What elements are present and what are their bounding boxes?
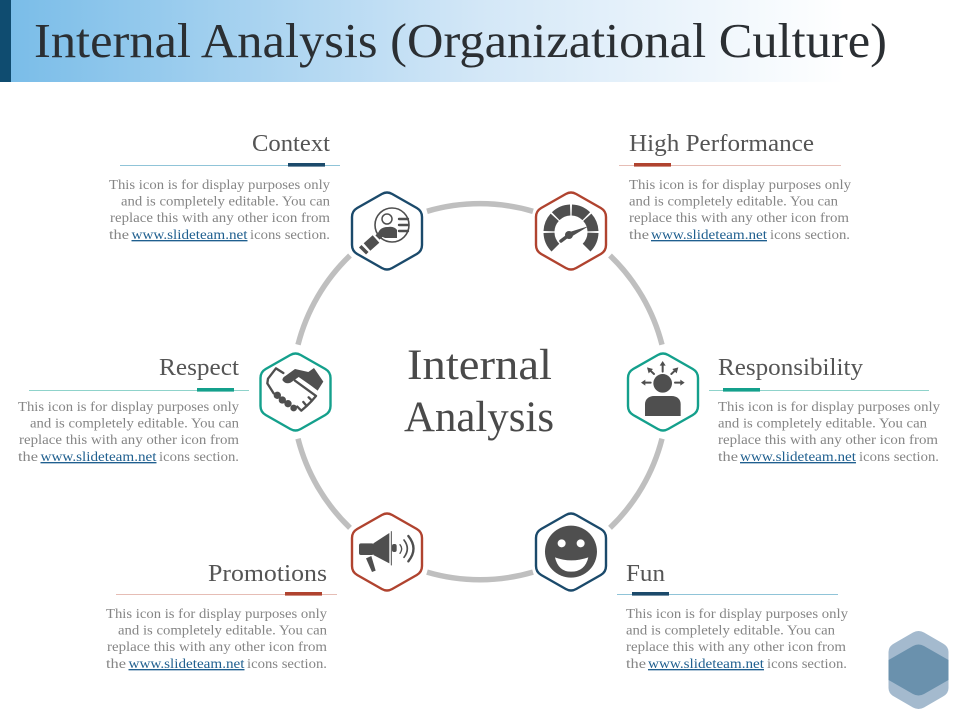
text: respect: replace this with any other icon from	[19, 432, 240, 447]
heading: high performance: High Performance	[629, 131, 814, 157]
text: context: the	[109, 227, 129, 242]
text: fun: www.slideteam.net	[648, 656, 764, 671]
centre label: Analysis	[404, 394, 554, 441]
text: promotions: the	[106, 656, 126, 671]
text: fun	[626, 606, 848, 671]
text: respect: This icon is for display purposes only	[18, 399, 239, 414]
text: context: www.slideteam.net	[132, 227, 248, 242]
text: high performance: icons section.	[770, 227, 850, 242]
text: promotions: This icon is for display purposes only	[106, 606, 327, 621]
heading: responsibility: Responsibility	[718, 355, 863, 381]
text: high performance	[629, 177, 851, 242]
text: fun: the	[626, 656, 646, 671]
text: respect: the	[18, 449, 38, 464]
icon: context magnifier	[352, 192, 422, 270]
text: responsibility: www.slideteam.net	[740, 449, 856, 464]
text: respect: icons section.	[159, 449, 239, 464]
rule: respect	[29, 388, 249, 392]
rule: responsibility	[709, 388, 929, 392]
icon: responsibility person with arrows	[628, 354, 698, 430]
text: promotions: icons section.	[247, 656, 327, 671]
text: fun: icons section.	[767, 656, 847, 671]
text: promotions	[106, 606, 328, 671]
rule: high performance	[619, 163, 841, 167]
icon: fun smiley	[536, 514, 606, 590]
text: responsibility: the	[718, 449, 738, 464]
centre label	[404, 342, 554, 441]
panel: context	[109, 131, 340, 242]
text: fun: This icon is for display purposes only	[626, 606, 848, 621]
text: high performance: This icon is for display purposes only	[629, 177, 851, 192]
text: respect	[18, 399, 240, 464]
panel: respect	[18, 355, 249, 464]
icon: respect handshake	[260, 354, 330, 430]
text: respect: www.slideteam.net	[40, 449, 157, 464]
text: responsibility	[718, 399, 940, 464]
text: high performance: www.slideteam.net	[651, 227, 767, 242]
text: fun: replace this with any other icon from	[626, 639, 847, 654]
text: responsibility: replace this with any other icon from	[718, 432, 939, 447]
text: respect: and is completely editable. You can	[30, 416, 239, 430]
text: promotions: and is completely editable. You can	[118, 622, 327, 638]
text: promotions: replace this with any other icon from	[107, 639, 328, 654]
text: high performance: the	[629, 227, 649, 242]
icon: high performance gauge	[536, 192, 606, 270]
panel: responsibility	[709, 355, 940, 464]
title: Internal Analysis (Organizational Culture)	[34, 13, 887, 68]
text: fun: and is completely editable. You can	[626, 622, 835, 638]
panel: fun	[617, 561, 848, 671]
text: context: This icon is for display purposes only	[109, 177, 330, 192]
icon: promotions megaphone	[352, 514, 422, 590]
panel: promotions	[106, 561, 337, 671]
text: high performance: replace this with any other icon from	[629, 210, 850, 225]
centre label: Internal	[407, 342, 552, 389]
text: context	[109, 177, 331, 242]
text: context: replace this with any other icon from	[110, 210, 331, 225]
text: responsibility: icons section.	[859, 449, 939, 464]
rule: context	[120, 163, 340, 167]
text: responsibility: This icon is for display purposes only	[718, 399, 940, 414]
text: context: and is completely editable. You can	[121, 194, 330, 208]
decorative hexagon badge	[888, 631, 948, 709]
panel: high performance	[619, 131, 851, 242]
text: high performance: and is completely editable. You can	[629, 194, 838, 208]
text: context: icons section.	[250, 227, 330, 242]
text: responsibility: and is completely editable. You can	[718, 416, 927, 430]
heading: fun: Fun	[626, 561, 665, 587]
heading: context: Context	[252, 131, 330, 157]
rule: promotions	[116, 592, 337, 596]
heading: promotions: Promotions	[208, 561, 327, 587]
heading: respect: Respect	[159, 355, 239, 381]
text: promotions: www.slideteam.net	[128, 656, 245, 671]
header band	[0, 0, 960, 82]
ring of arc segments	[298, 204, 662, 580]
rule: fun	[617, 592, 838, 596]
